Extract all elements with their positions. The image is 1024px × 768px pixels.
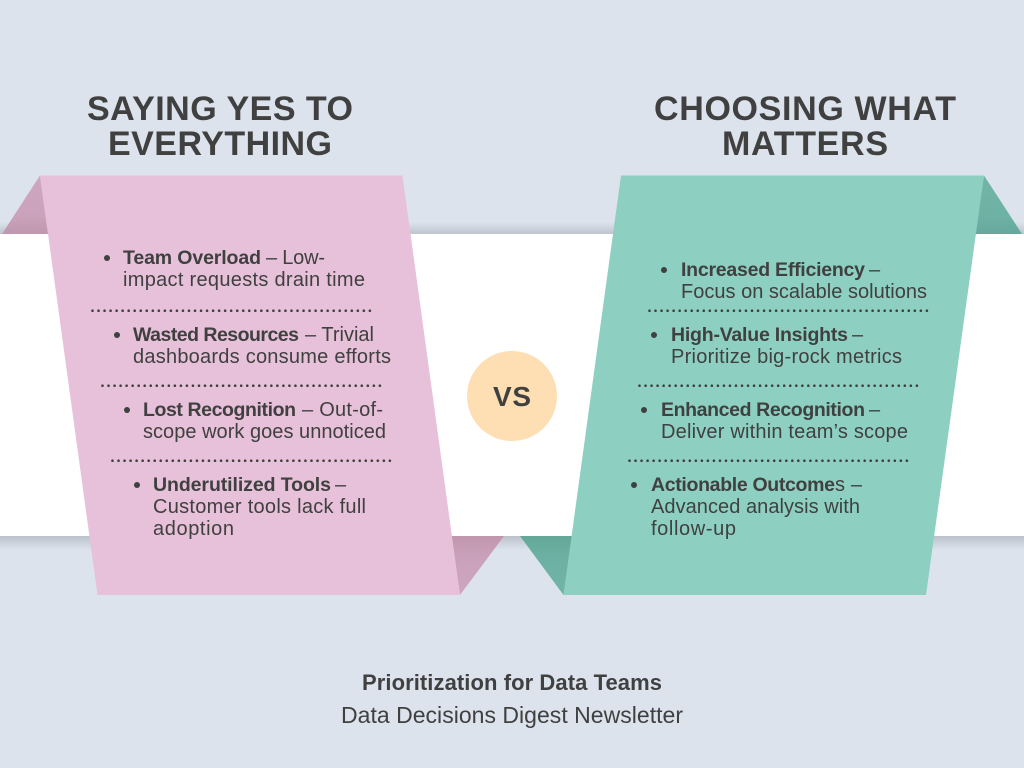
item: increased efficiency: Focus on scalable solutions: [681, 281, 927, 303]
item: actionable outcomes: s –: [835, 474, 863, 496]
item: team overload: – Low-: [266, 247, 325, 269]
item: high-value insights: –: [852, 324, 864, 346]
item: increased efficiency: –: [869, 259, 881, 281]
item: actionable outcomes: [631, 474, 863, 540]
pink ribbon shape: [40, 176, 460, 595]
item: lost recognition: [124, 399, 386, 443]
pink fold bottom right: [452, 536, 504, 595]
item: enhanced recognition: Deliver within team’s scope: [661, 421, 908, 443]
vs badge: VS: [493, 381, 531, 412]
heading: choosing what matters: [654, 90, 956, 163]
item: enhanced recognition: [641, 399, 908, 443]
panel: choosing what matters: [520, 176, 1022, 595]
item: high-value insights: Prioritize big-rock metrics: [671, 346, 902, 368]
item: increased efficiency: Increased Efficiency: [681, 259, 865, 281]
item: underutilized tools: adoption: [153, 518, 234, 540]
teal fold bottom left: [520, 536, 572, 595]
footer title: Prioritization for Data Teams: [362, 670, 662, 695]
item: actionable outcomes: Advanced analysis with: [651, 496, 860, 518]
item: high-value insights: [651, 324, 902, 368]
heading: saying yes to everything: SAYING YES TO: [87, 90, 353, 128]
teal ribbon shape: [564, 176, 984, 595]
item: wasted resources: [114, 324, 391, 368]
item: high-value insights: High-Value Insights: [671, 324, 848, 346]
item: underutilized tools: Customer tools lack full: [153, 496, 366, 518]
item: lost recognition: scope work goes unnoticed: [143, 421, 386, 443]
panel: saying yes to everything: [2, 176, 504, 595]
item: wasted resources: dashboards consume efforts: [133, 346, 391, 368]
heading: saying yes to everything: EVERYTHING: [108, 125, 332, 163]
item: increased efficiency: [661, 259, 927, 303]
item: wasted resources: Wasted Resources: [133, 324, 299, 346]
footer subtitle: Data Decisions Digest Newsletter: [341, 702, 683, 728]
pink fold top left: [2, 176, 48, 234]
item: team overload: Team Overload: [123, 247, 261, 269]
vs badge: [467, 351, 557, 441]
heading: saying yes to everything: [87, 90, 353, 163]
item: lost recognition: Lost Recognition: [143, 399, 296, 421]
white horizontal band: [0, 222, 1024, 550]
item: enhanced recognition: –: [869, 399, 881, 421]
item: lost recognition: – Out-of-: [302, 399, 383, 421]
item: actionable outcomes: follow-up: [651, 518, 736, 540]
item: underutilized tools: Underutilized Tools: [153, 474, 331, 496]
item: underutilized tools: [134, 474, 366, 540]
teal fold top right: [975, 176, 1022, 234]
heading: choosing what matters: CHOOSING WHAT: [654, 90, 956, 128]
item: actionable outcomes: Actionable Outcome: [651, 474, 835, 496]
heading: choosing what matters: MATTERS: [722, 125, 888, 163]
item: team overload: impact requests drain time: [123, 269, 365, 291]
item: team overload: [104, 247, 365, 291]
item: enhanced recognition: Enhanced Recognition: [661, 399, 865, 421]
item: underutilized tools: –: [335, 474, 347, 496]
item: wasted resources: – Trivial: [305, 324, 374, 346]
